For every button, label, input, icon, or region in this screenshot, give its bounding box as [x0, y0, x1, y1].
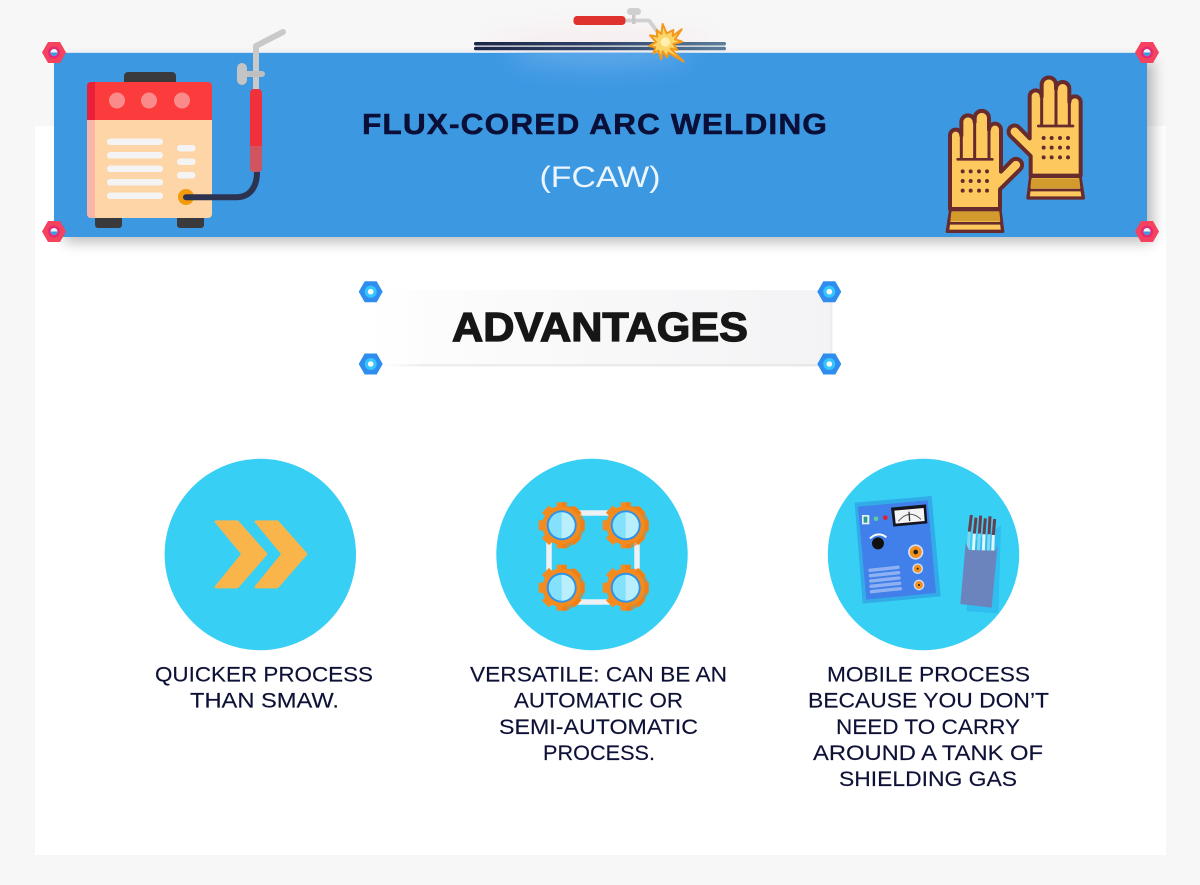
- caption: AUTOMATIC OR: [514, 690, 683, 712]
- caption: MOBILE PROCESS: [827, 664, 1030, 686]
- icon: welding machine: [87, 32, 283, 228]
- panel: versatile: [470, 459, 727, 765]
- right glove: [1009, 77, 1083, 198]
- indicator lights: [109, 92, 190, 108]
- caption: AROUND A TANK OF: [813, 742, 1043, 765]
- icon: double chevrons: [216, 522, 306, 587]
- icon: red nut bottom right: [1135, 221, 1159, 242]
- icon: spark: [649, 24, 684, 62]
- icon: blue nut top left: [359, 281, 383, 302]
- caption: PROCESS.: [543, 742, 655, 765]
- torch knob: [243, 71, 265, 77]
- panel: advantages heading plate: [370, 290, 832, 366]
- icon circle: [496, 459, 688, 650]
- torch neck: [256, 32, 283, 90]
- panel: mobile process: [808, 459, 1049, 791]
- icon: linked gears: [539, 502, 649, 611]
- caption: [155, 664, 373, 712]
- icon: blue nut bottom left: [359, 354, 383, 374]
- caption: [470, 664, 727, 765]
- machine handle: [124, 72, 176, 86]
- icon circle: [165, 459, 356, 650]
- machine top: [87, 82, 212, 120]
- icon: blue nut top right: [817, 281, 841, 302]
- machine body: [87, 120, 212, 218]
- white content panel: [35, 126, 1166, 855]
- welding torch and rods above banner: [474, 8, 726, 56]
- panel: quicker process: [155, 459, 373, 712]
- icon: control panel and electrodes: [855, 496, 1001, 613]
- caption: BECAUSE YOU DON’T: [808, 690, 1049, 712]
- icon circle: [828, 459, 1019, 650]
- icon: gloves: [947, 77, 1083, 231]
- machine feet: [95, 215, 122, 228]
- icon: red nut top right: [1135, 42, 1159, 63]
- left glove: [947, 111, 1022, 231]
- electrode pack: [960, 515, 1001, 613]
- torch grip: [250, 89, 262, 172]
- hose: [186, 172, 257, 197]
- socket: [178, 189, 194, 205]
- control panel: [855, 496, 941, 604]
- caption: SEMI-AUTOMATIC: [499, 716, 698, 739]
- subheading: (FCAW): [540, 161, 660, 194]
- caption: SHIELDING GAS: [839, 768, 1017, 791]
- panel: title banner: [54, 36, 1147, 237]
- caption: VERSATILE: CAN BE AN: [470, 664, 727, 686]
- heading: ADVANTAGES: [452, 304, 748, 350]
- rods: [474, 42, 726, 50]
- heading: FLUX-CORED ARC WELDING: [362, 109, 828, 141]
- torch: [574, 8, 662, 38]
- caption: NEED TO CARRY: [836, 716, 1020, 739]
- panel lines: [107, 138, 196, 199]
- caption: [808, 664, 1049, 791]
- icon: red nut bottom left: [42, 221, 66, 242]
- icon: red nut top left: [42, 42, 66, 63]
- icon: blue nut bottom right: [817, 354, 841, 374]
- banner shadow: [64, 60, 1153, 242]
- caption: THAN SMAW.: [190, 690, 339, 712]
- caption: QUICKER PROCESS: [155, 664, 373, 686]
